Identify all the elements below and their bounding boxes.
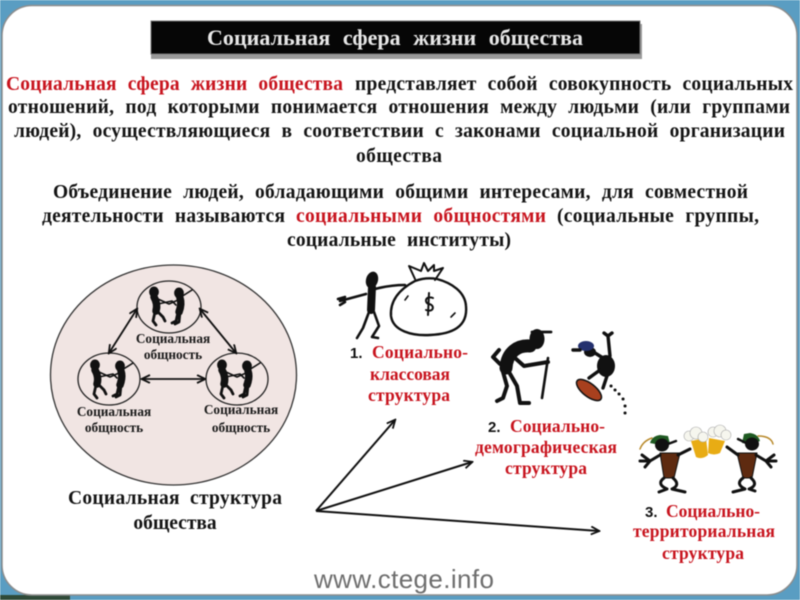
label: social-demographic structure [475,416,617,478]
label: right community: общность [212,420,270,435]
communities paragraph [42,182,759,251]
label: social-class structure: Социально- [372,342,468,362]
icon: two figures with beer [640,425,776,492]
corner accent [0,595,70,600]
community circle: left [78,353,140,405]
website url: www.ctege.info [313,564,494,594]
arrows to three structures [316,420,599,531]
communities paragraph: деятельности называются [42,206,285,227]
label: social-territorial structure: территориальная [633,521,775,541]
label: right community: Социальная [204,402,278,417]
arrow: top to right [200,309,236,353]
label: social-class structure: структура [368,385,450,405]
label: social-territorial structure [633,501,775,563]
definition paragraph: общества [356,146,442,167]
diagram: social community circle [50,265,296,485]
label: social-class structure [350,342,468,405]
definition paragraph [6,74,793,167]
communities paragraph: (социальные группы, [557,206,759,227]
label: social-demographic structure: структура [505,458,587,478]
social structure caption: Социальная структура [68,488,282,509]
icon: skateboarder [573,333,625,413]
communities paragraph: Объединение людей, обладающими общими интересами, для совместной [53,182,748,203]
title bar: Социальная сфера жизни общества [207,25,583,50]
label: social-territorial structure: Социально- [666,501,760,521]
social structure caption: общества [133,513,217,534]
social structure caption [68,488,282,534]
communities paragraph: социальные институты) [287,230,511,251]
community circle: right [206,353,268,405]
icon: man with money bag [338,263,466,338]
label: social-territorial structure: структура [662,543,744,563]
definition paragraph: Социальная сфера жизни общества [6,74,343,95]
label: social-demographic structure: демографическая [475,437,617,457]
definition paragraph: отношений, под которыми понимается отношения между людьми (или группами [8,97,790,118]
label: top community: Социальная [136,331,210,346]
title bar [151,21,642,59]
icon: old man with cane [493,329,551,403]
label: top community: общность [144,347,202,362]
label: social-territorial structure: 3. [645,504,658,521]
arrow: top to left [109,309,137,353]
label: left community: общность [85,420,143,435]
label: social-demographic structure: 2. [488,419,501,436]
community circle: top [137,281,201,333]
label: left community: Социальная [77,404,151,419]
label: social-class structure: 1. [350,345,363,362]
label: social-class structure: классовая [370,364,450,384]
definition paragraph: представляет собой совокупность социальных [355,74,793,95]
communities paragraph: социальными общностями [296,206,546,227]
definition paragraph: людей), осуществляющиеся в соответствии с законами социальной организации [14,121,785,142]
label: social-demographic structure: Социально- [510,416,605,436]
arrow: left to right [142,378,205,380]
